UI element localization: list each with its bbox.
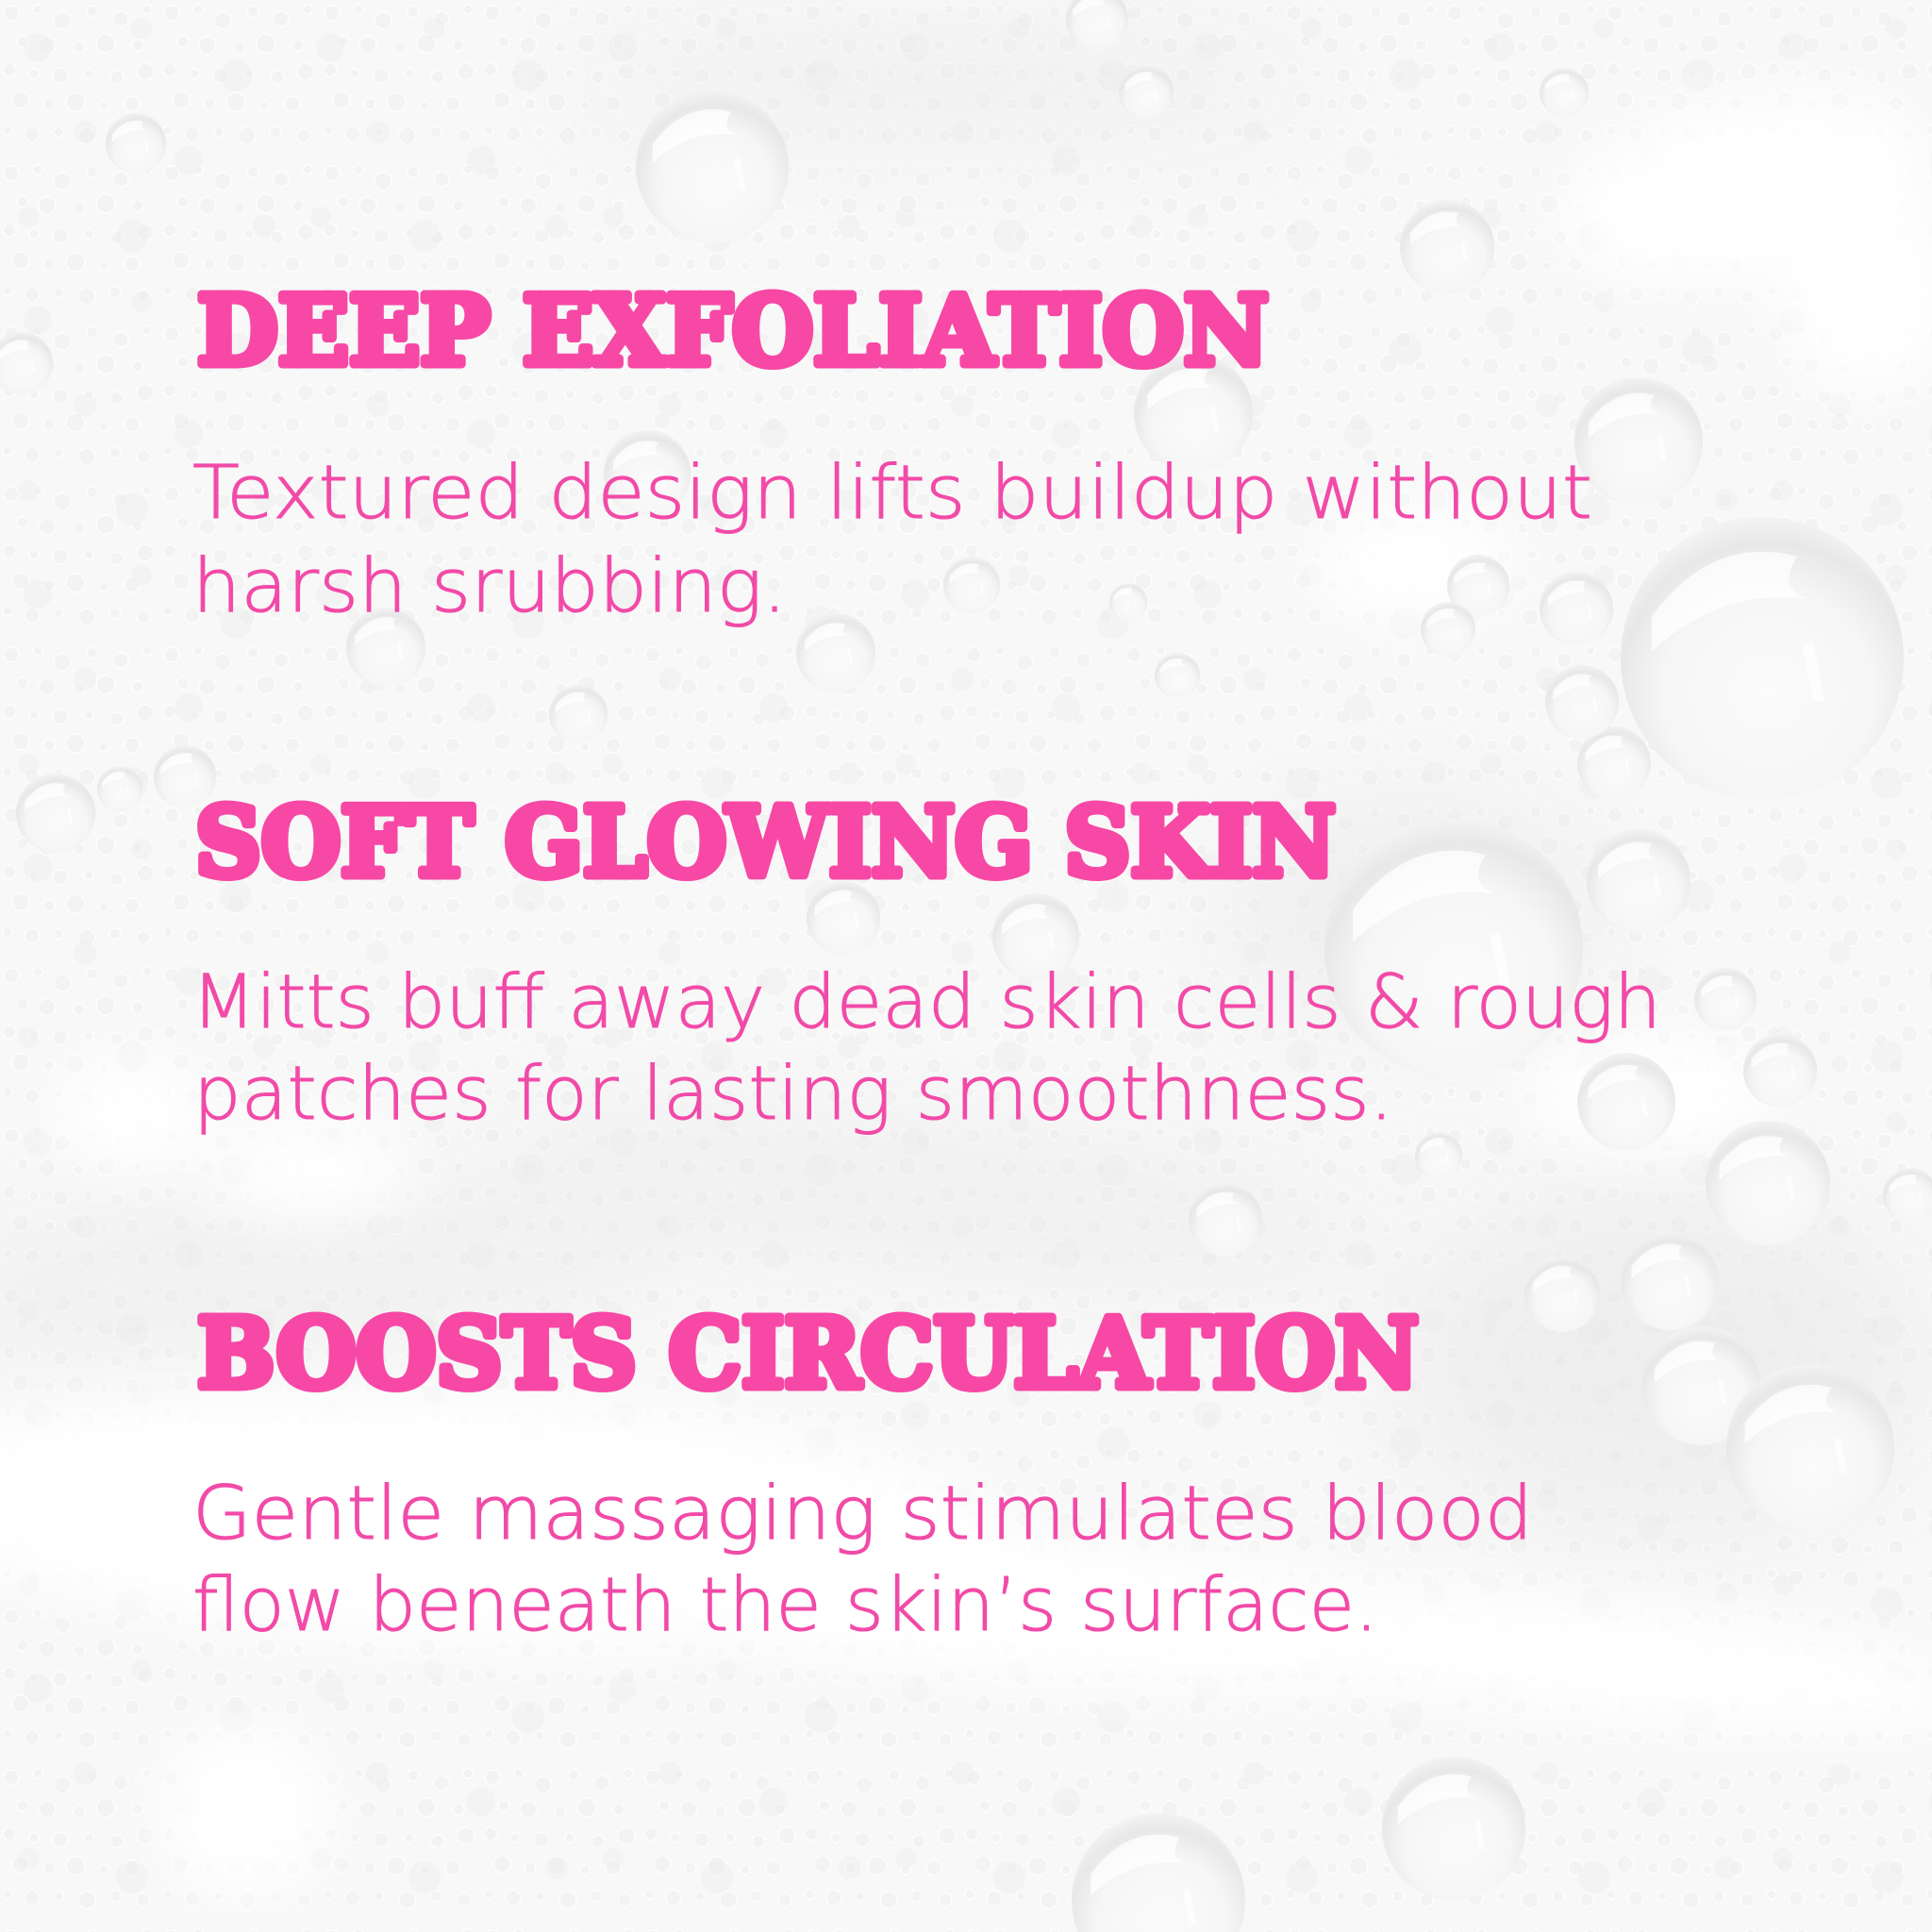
body: boosts circulation line 2: flow beneath the skin’s surface. xyxy=(192,1563,1378,1648)
body: soft glowing skin line 2: patches for lasting smoothness. xyxy=(193,1052,1393,1137)
body: deep exfoliation line 2: harsh srubbing. xyxy=(192,544,787,629)
section: deep exfoliation xyxy=(192,275,1592,629)
section: boosts circulation xyxy=(192,1297,1533,1648)
heading: deep exfoliation: DEEP EXFOLIATION xyxy=(197,275,1269,387)
soft grey shading xyxy=(0,42,1924,1528)
section: soft glowing skin xyxy=(192,786,1661,1137)
body: soft glowing skin line 1: Mitts buff away dead skin cells & rough xyxy=(192,960,1661,1045)
body: deep exfoliation line 1: Textured design lifts buildup without xyxy=(192,451,1592,536)
heading: boosts circulation: BOOSTS CIRCULATION xyxy=(197,1297,1419,1409)
body: boosts circulation line 1: Gentle massaging stimulates blood xyxy=(192,1472,1533,1557)
heading: soft glowing skin: SOFT GLOWING SKIN xyxy=(195,786,1336,898)
